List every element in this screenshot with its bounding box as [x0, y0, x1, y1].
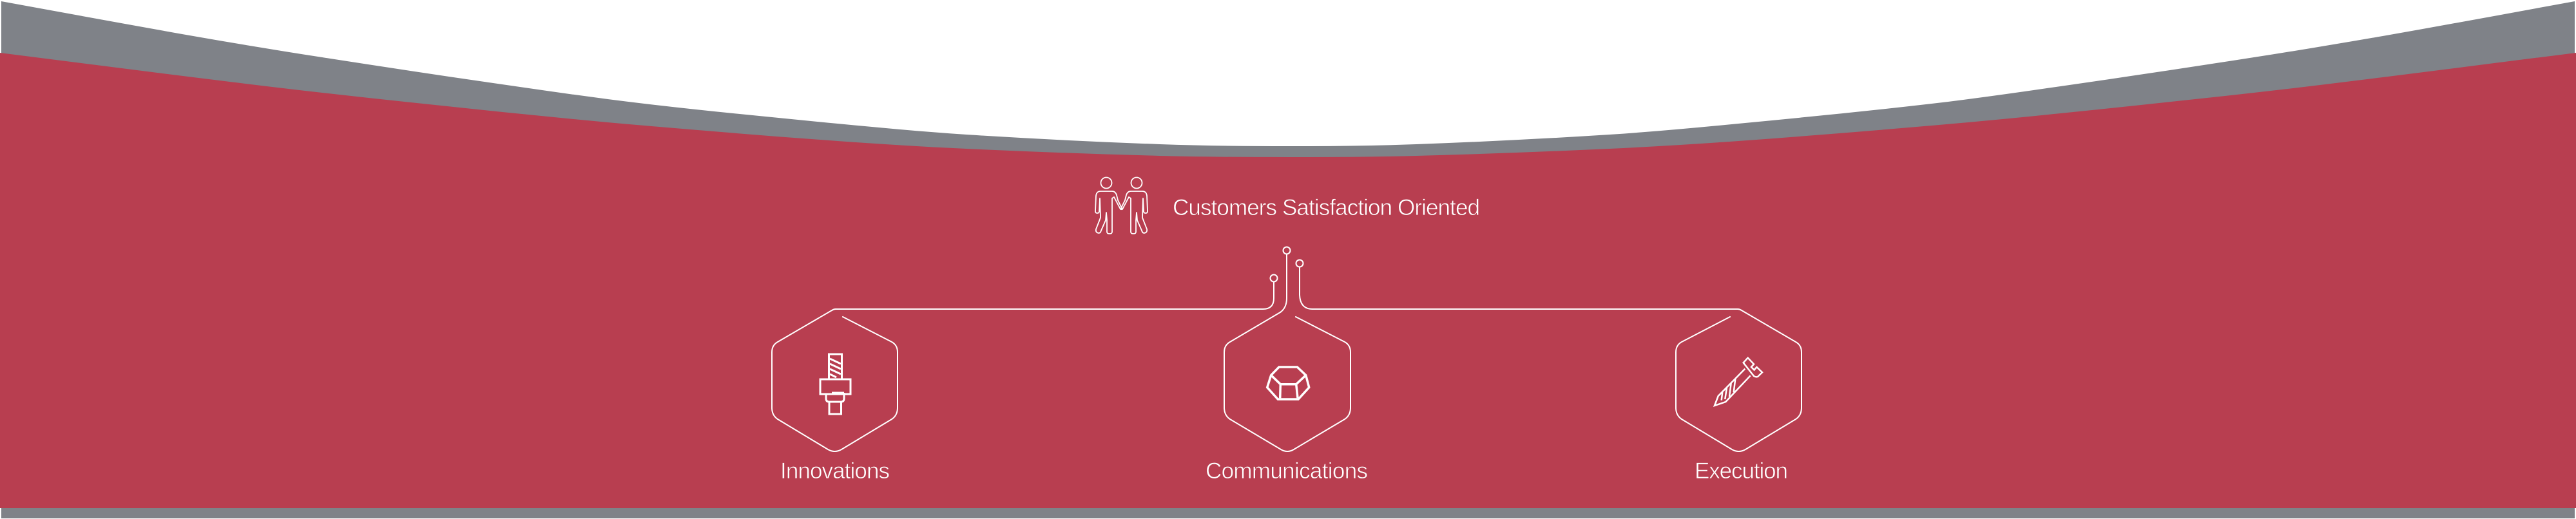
grey curved band — [1, 1, 2575, 193]
label: communications: Communications — [1206, 458, 1368, 484]
icon: threaded bolt — [820, 354, 851, 414]
grey bottom strip — [1, 508, 2575, 518]
connector: to communications hexagon — [1283, 247, 1290, 254]
hexagon: execution — [1676, 309, 1802, 451]
label: execution: Execution — [1695, 458, 1788, 484]
connector: to execution hexagon — [1296, 260, 1735, 309]
connector: to innovations hexagon — [840, 274, 1277, 309]
hexagon: innovations — [772, 309, 898, 451]
hexagon: communications — [1224, 254, 1350, 451]
heading: customers satisfaction oriented: Customers Satisfaction Oriented — [1173, 195, 1480, 220]
icon: two people holding hands — [1095, 178, 1148, 234]
label: innovations: Innovations — [780, 458, 890, 484]
icon: screw — [1715, 358, 1762, 406]
icon: hexagonal nut — [1267, 367, 1309, 399]
